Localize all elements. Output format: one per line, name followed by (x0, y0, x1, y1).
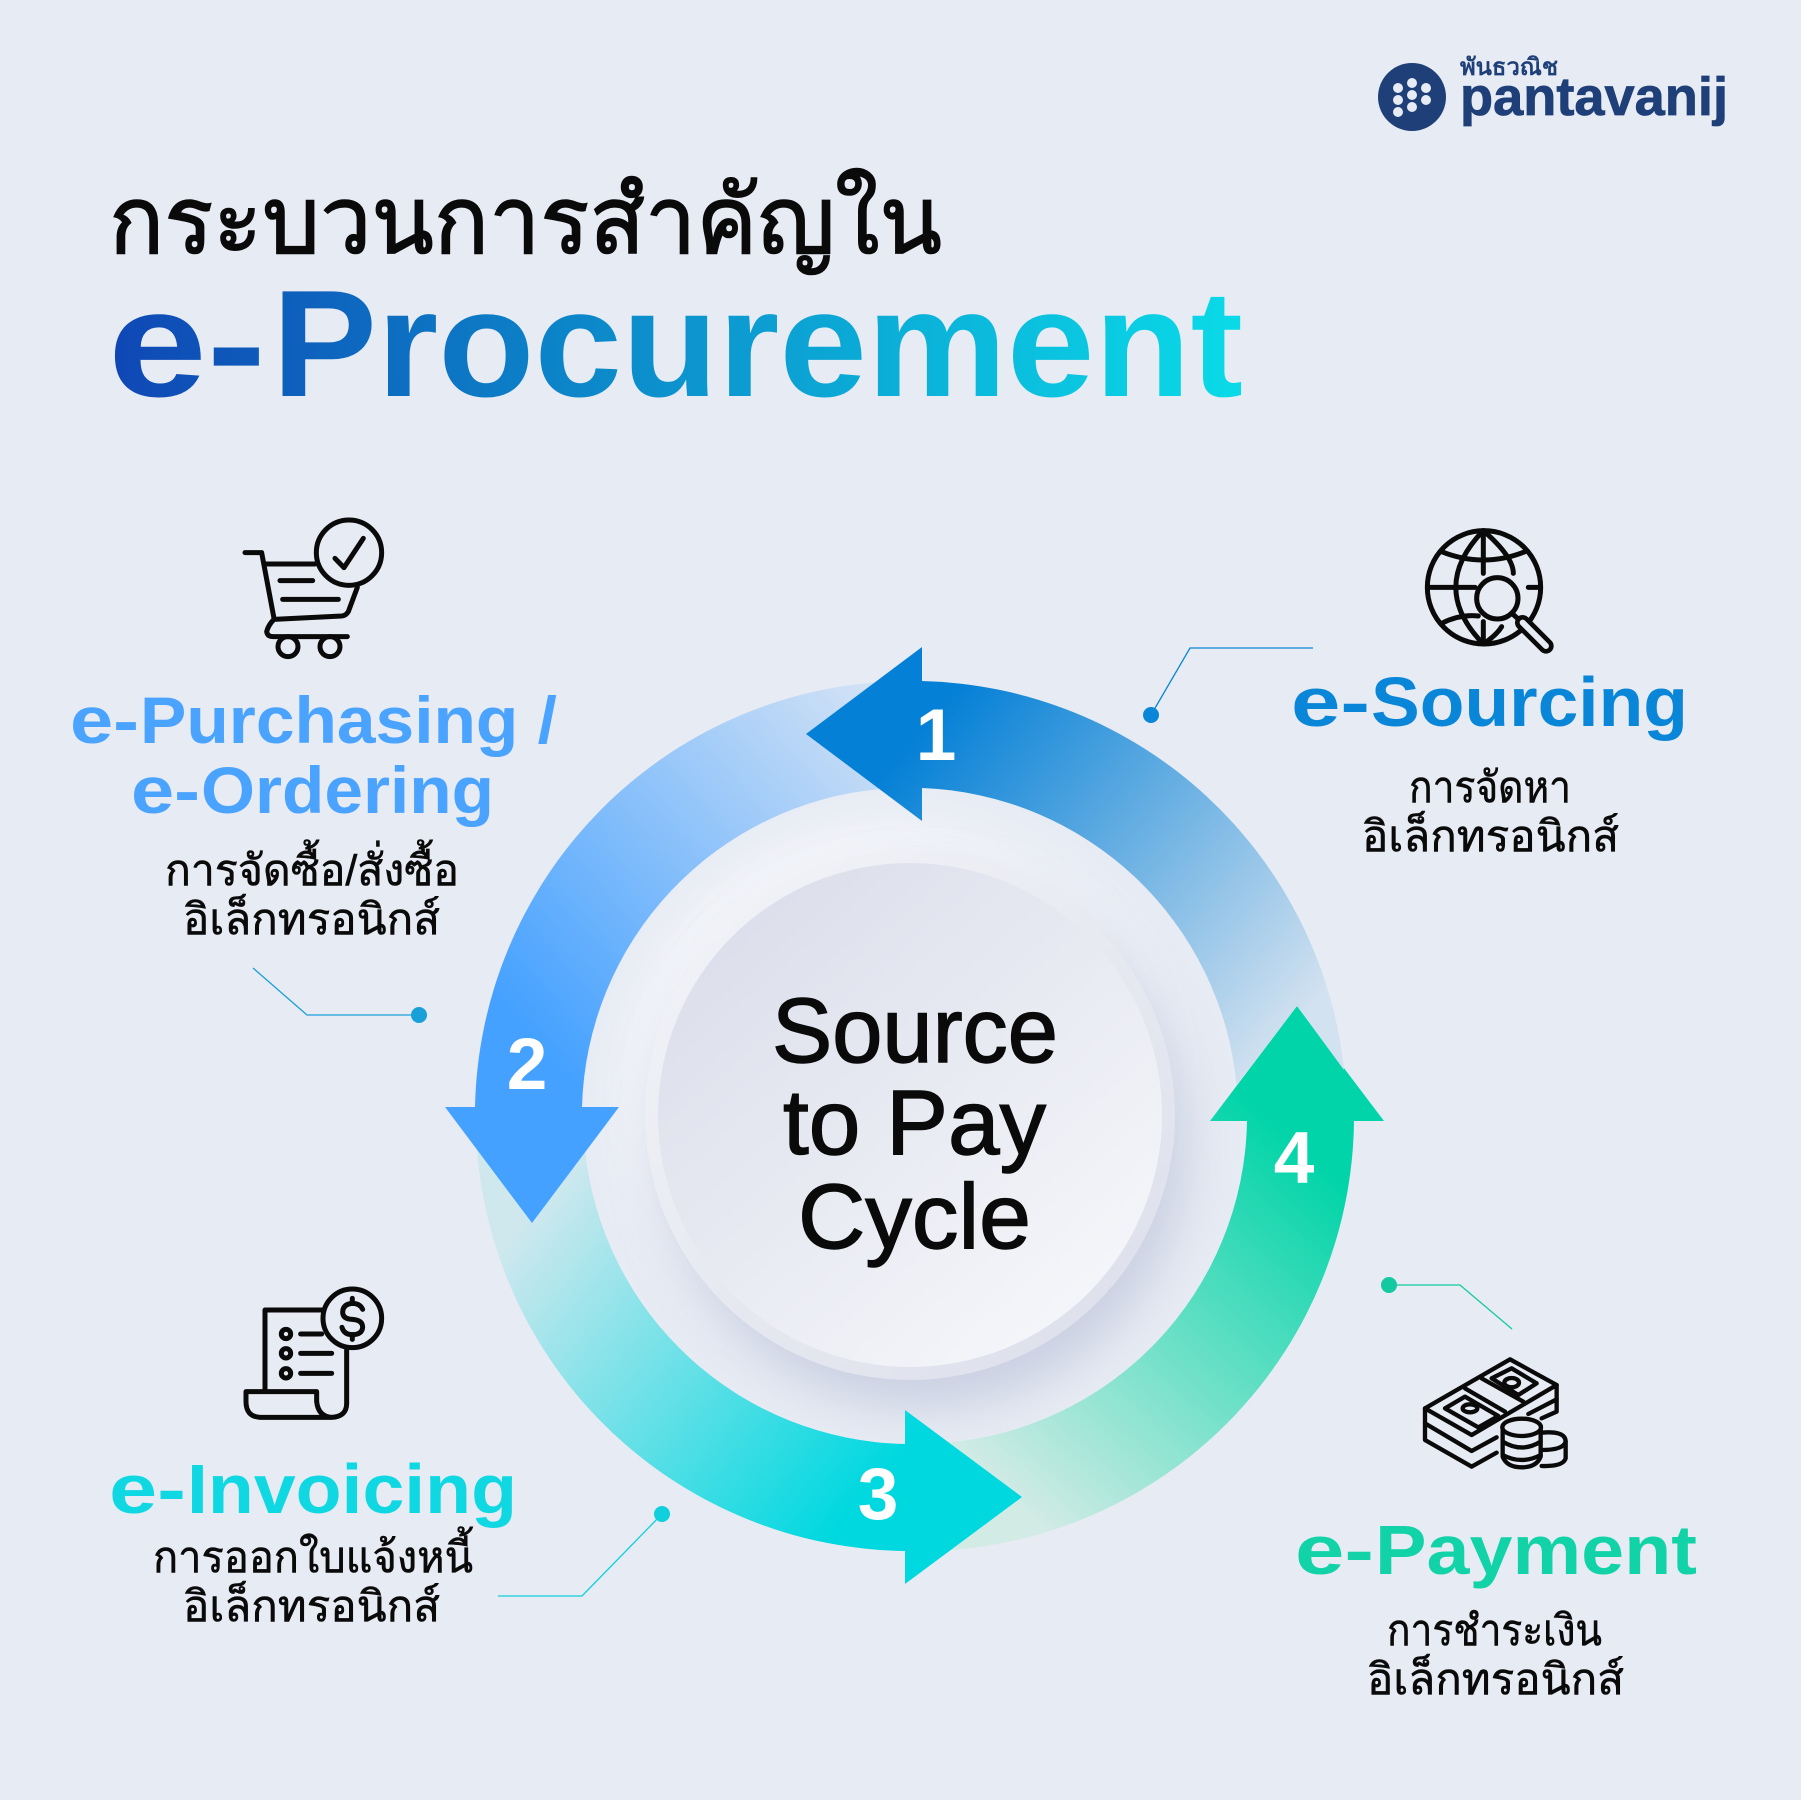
heading and description: e-Purchasing / e-Ordering: Ordering (201, 753, 494, 827)
heading and description: e-Purchasing / e-Ordering: e- (131, 753, 200, 827)
arrow 4 (940, 1006, 1384, 1550)
connector: e-Sourcing (1143, 648, 1313, 723)
arrow 2 (445, 682, 880, 1223)
heading and description: e-Sourcing: Sourcing (1371, 663, 1688, 741)
arrow 1 (806, 647, 1344, 1085)
heading and description: e-Invoicing (109, 1450, 517, 1631)
center text: Source to Pay Cycle: Cycle (798, 1166, 1031, 1268)
heading and description: e-Purchasing / e-Ordering: การจัดซื้อ/สั่งซื้อ (165, 839, 459, 895)
icon: invoice with dollar (246, 1289, 382, 1417)
title: e-Procurement: Procurement (272, 259, 1243, 429)
connector: e-Purchasing (253, 968, 427, 1023)
heading and description: e-Sourcing (1291, 663, 1688, 861)
title: e-Procurement: e- (108, 259, 266, 429)
icon: globe with magnifier (1427, 531, 1546, 646)
icon: shopping cart with check (245, 520, 382, 657)
center text: Source to Pay Cycle: Source (772, 980, 1058, 1082)
connector: e-Payment (1381, 1277, 1512, 1329)
number 3: 3 (858, 1454, 898, 1535)
heading and description: e-Purchasing / e-Ordering (70, 683, 557, 944)
heading and description: e-Sourcing: อิเล็กทรอนิกส์ (1362, 811, 1619, 861)
logo: pantavanij (1378, 54, 1728, 131)
title: Thai line: กระบวนการสำคัญใน (109, 168, 942, 275)
center disc: inner circle (658, 863, 1162, 1367)
logo: pantavanij: pantavanij (1460, 67, 1728, 127)
heading and description: e-Invoicing: การออกใบแจ้งหนี้ (153, 1526, 473, 1582)
heading and description: e-Payment: อิเล็กทรอนิกส์ (1367, 1654, 1624, 1704)
heading and description: e-Invoicing: อิเล็กทรอนิกส์ (183, 1581, 440, 1631)
heading and description: e-Invoicing: e- (109, 1450, 186, 1528)
heading and description: e-Payment (1295, 1511, 1697, 1704)
heading and description: e-Sourcing: e- (1291, 663, 1370, 741)
heading and description: e-Sourcing: การจัดหา (1409, 764, 1571, 812)
center text: Source to Pay Cycle: to Pay (783, 1072, 1046, 1174)
heading and description: e-Invoicing: Invoicing (187, 1450, 517, 1528)
heading and description: e-Payment: e- (1295, 1511, 1374, 1589)
heading and description: e-Payment: การชำระเงิน (1387, 1607, 1602, 1655)
logo: pantavanij: พันธวณิช (1460, 54, 1558, 81)
heading and description: e-Purchasing / e-Ordering: e- (70, 683, 139, 757)
number 2: 2 (507, 1024, 547, 1105)
center text: Source to Pay Cycle (772, 980, 1058, 1268)
number 4: 4 (1274, 1118, 1315, 1199)
icon: banknotes and coins (1425, 1359, 1566, 1467)
center disc shadow (657, 877, 1187, 1407)
number 1: 1 (916, 695, 956, 776)
heading and description: e-Purchasing / e-Ordering: อิเล็กทรอนิกส์ (183, 894, 440, 944)
heading and description: e-Payment: Payment (1375, 1511, 1697, 1589)
arrow 3 (477, 1150, 1022, 1584)
center disc highlight (622, 822, 1162, 1362)
heading and description: e-Purchasing / e-Ordering: Purchasing / (140, 683, 557, 757)
center disc: outer ring (645, 850, 1175, 1380)
connector: e-Invoicing (498, 1506, 670, 1596)
